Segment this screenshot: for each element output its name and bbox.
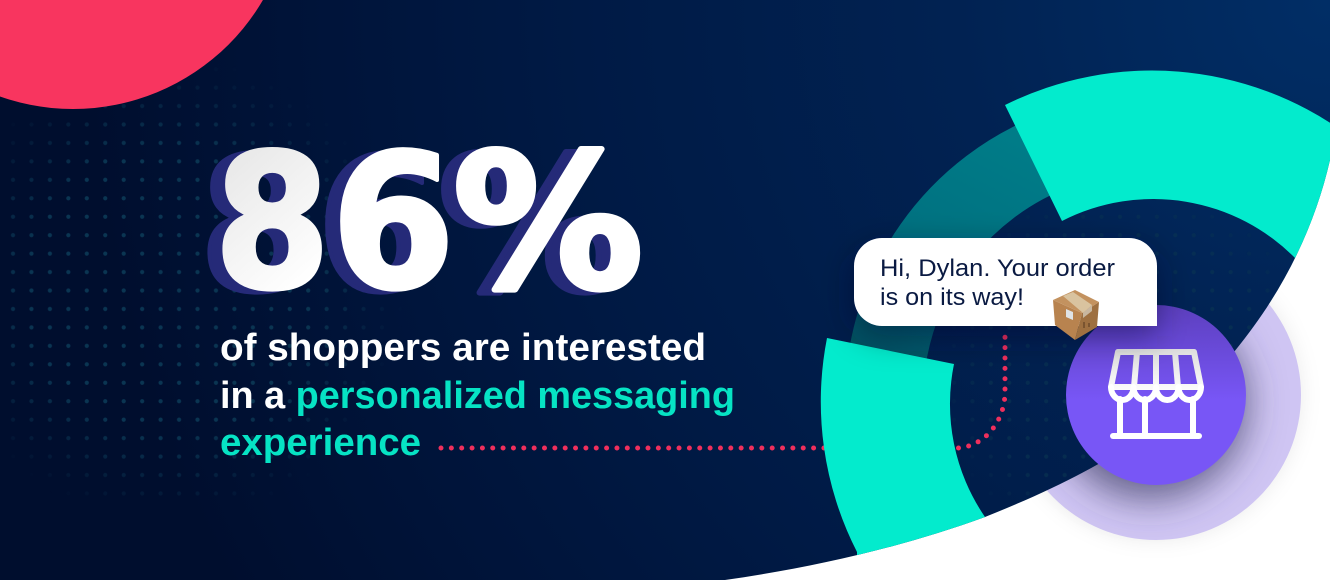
big number 86%	[199, 115, 643, 335]
number shadow: 8	[199, 118, 315, 334]
speech bubble	[854, 238, 1157, 336]
bubble message	[880, 255, 1115, 311]
caption text	[220, 327, 735, 464]
number shadow	[199, 118, 628, 335]
caption line 1: of shoppers are interested	[220, 327, 706, 369]
number shadow: 6	[316, 118, 440, 334]
teal ring segment: top right	[1005, 71, 1330, 260]
dot grid: right	[971, 234, 1267, 495]
dot grid: left	[10, 86, 366, 496]
dotted connector line	[441, 332, 1005, 448]
number foreground: %	[453, 116, 643, 332]
dim teal ring arc	[884, 149, 1060, 400]
caption line 2: in a personalized messaging	[220, 375, 735, 417]
bubble message: is on its way!	[880, 284, 1024, 311]
purple store circle	[1066, 305, 1246, 485]
icon: storefront	[1111, 352, 1201, 436]
pink corner circle	[0, 0, 293, 109]
icon: cardboard box	[1053, 290, 1099, 340]
number foreground	[214, 115, 643, 332]
number foreground: 6	[331, 115, 455, 331]
number shadow: %	[438, 119, 628, 335]
teal ring segment: bottom left	[820, 338, 985, 556]
caption line 3: experience	[220, 422, 421, 464]
pale purple circle	[1011, 250, 1301, 540]
bubble message: Hi, Dylan. Your order	[880, 255, 1115, 282]
number foreground: 8	[214, 115, 330, 331]
